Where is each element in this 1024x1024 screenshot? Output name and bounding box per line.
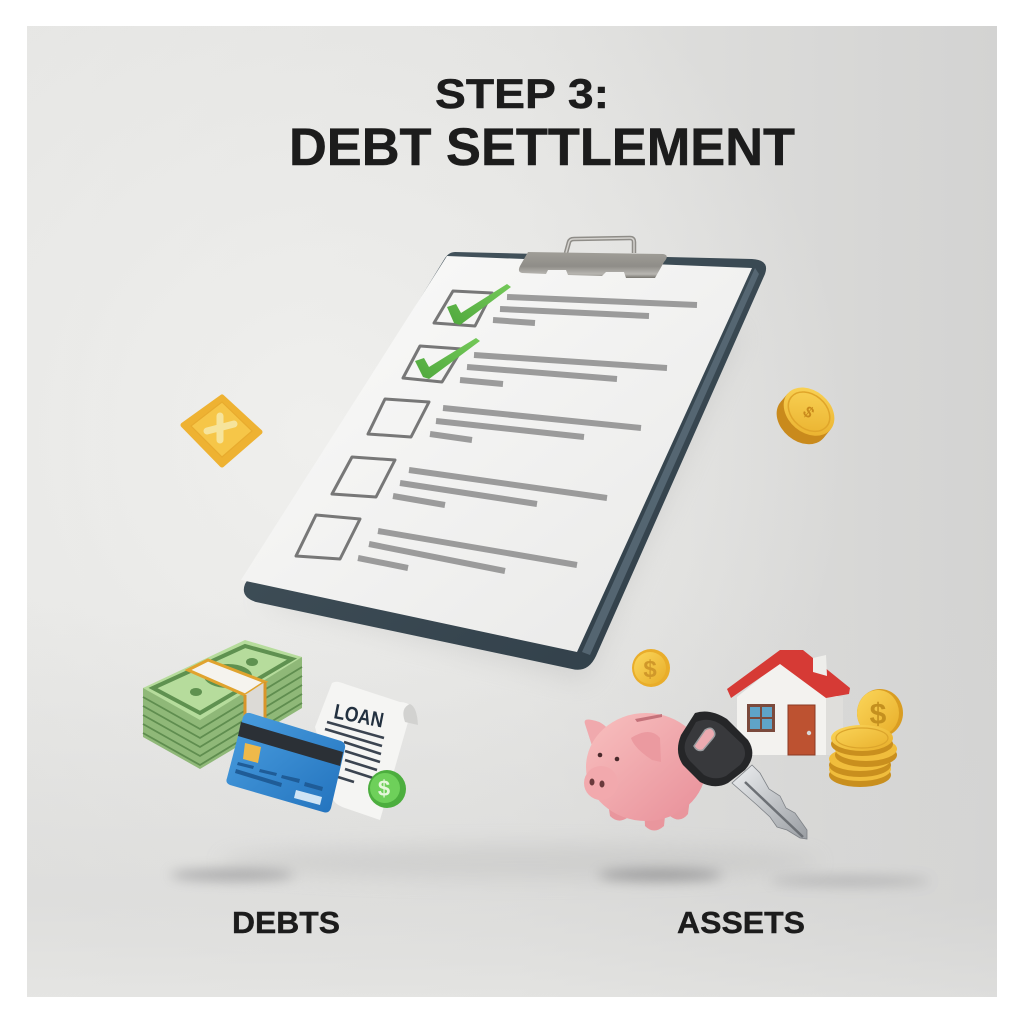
label: debts: DEBTS (232, 905, 340, 940)
icon: coin stack: $ (870, 698, 887, 731)
icon: loan document (315, 682, 418, 820)
checklist row 5 (296, 515, 577, 571)
checklist row 2 (checked) (403, 338, 667, 384)
paper band (188, 660, 265, 695)
icon: small gold coin: $ (643, 656, 657, 683)
icon: gold coin right: $ (799, 403, 817, 422)
icon: house (727, 650, 850, 755)
metal clip (519, 238, 667, 278)
icon: piggy bank (584, 713, 706, 830)
icon: credit card (226, 713, 345, 812)
title (289, 70, 795, 177)
icon: gold coin right (767, 378, 844, 454)
icon: small gold coin (632, 649, 670, 687)
paper sheet (241, 256, 752, 652)
icon: car key (678, 711, 807, 839)
debts icon group (143, 640, 418, 820)
title: STEP 3: (435, 70, 609, 117)
title: DEBT SETTLEMENT (289, 118, 795, 177)
icon: loan document: LOAN (332, 700, 386, 732)
icon: coin stack (829, 689, 903, 787)
floor shadows (170, 844, 930, 886)
checklist row 3 (368, 399, 641, 440)
icon: green dollar coin (368, 770, 406, 808)
checklist row 4 (332, 457, 607, 505)
clipboard shadow (260, 330, 740, 680)
label: assets: ASSETS (677, 905, 805, 940)
assets icon group (584, 649, 903, 839)
checklist row 1 (checked) (434, 284, 697, 326)
icon: green dollar coin: $ (378, 776, 390, 801)
clipboard backing board (244, 252, 766, 670)
clipboard (241, 238, 766, 680)
icon: cash stack (143, 640, 302, 769)
icon: gold diamond with x (183, 397, 260, 465)
